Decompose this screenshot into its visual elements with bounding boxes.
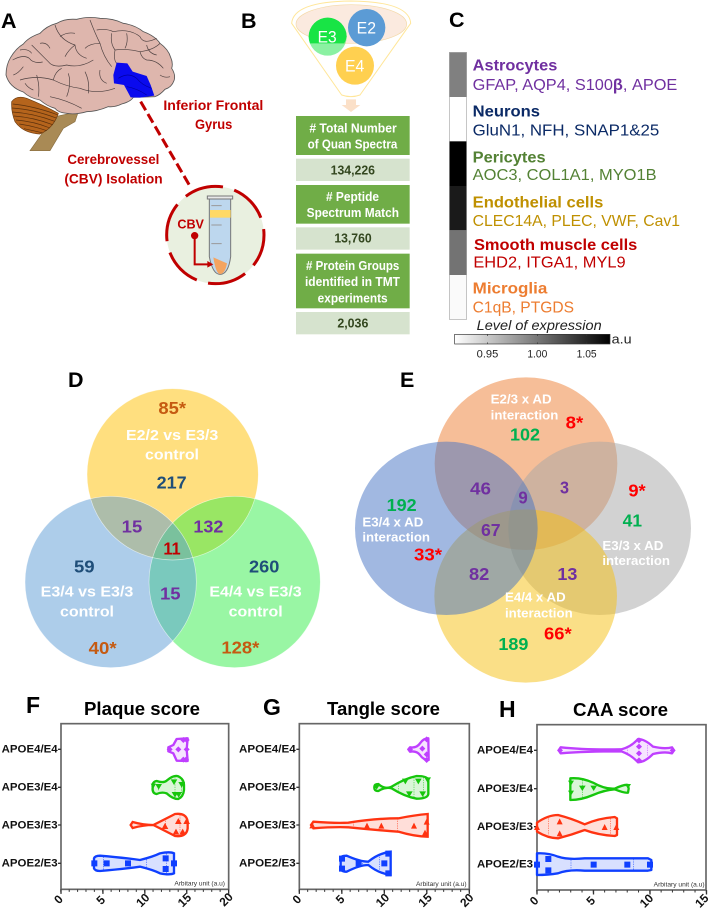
category labels: APOE3/E3 <box>2 819 58 831</box>
note: arbitrary unit: Arbitary unit (a.u) <box>654 882 705 889</box>
label: microglia <box>473 280 574 316</box>
set: E2/3 x AD: 8* <box>566 412 583 432</box>
set: E4/4 vs E3/3: E4/4 vs E3/3 <box>209 585 302 601</box>
overlap counts: 13 <box>557 564 577 584</box>
venn ellipses <box>355 377 691 683</box>
icon: cerebellum <box>12 97 58 134</box>
overlap counts: 67 <box>481 520 501 540</box>
violin: APOE3/E3 <box>309 814 430 837</box>
set: E4/4 x AD: 189 <box>498 634 528 654</box>
x axis labels: 5 <box>94 893 108 907</box>
plot frame and axis <box>58 724 230 892</box>
x axis labels <box>51 890 236 909</box>
box: total number of quan spectra: # Total Number <box>309 121 397 135</box>
set: E3/3 x AD: E3/3 x AD <box>602 538 663 553</box>
set: E3/4 x AD <box>362 495 442 565</box>
set: E3/4 x AD: E3/4 x AD <box>362 515 423 530</box>
icon: CBV tube in dashed circle: CBV <box>177 218 205 232</box>
icon: E4 circle <box>336 47 374 85</box>
box: protein groups: experiments <box>318 292 388 306</box>
box: peptide spectrum match: Spectrum Match <box>307 206 399 220</box>
arrow: funnel down <box>342 99 360 112</box>
label: cerebrovessel isolation <box>64 152 163 187</box>
x axis labels: 5 <box>584 893 598 908</box>
label: inferior frontal gyrus: Gyrus <box>195 117 233 132</box>
icon: inferior frontal gyrus highlight <box>113 63 154 98</box>
set: E2/2 vs E3/3: 217 <box>157 473 187 493</box>
panel letter A: A <box>1 9 17 33</box>
category labels: APOE2/E3 <box>477 859 533 871</box>
set: E2/3 x AD <box>491 391 583 445</box>
set: E3/4 vs E3/3: 40* <box>89 638 117 658</box>
set: E3/4 x AD: interaction <box>362 530 430 545</box>
set: E4/4 vs E3/3: 128* <box>221 637 260 657</box>
overlap counts: 15 <box>160 583 181 603</box>
plot frame and axis <box>534 725 707 892</box>
overlap counts: 11 <box>163 538 181 558</box>
set: E3/4 vs E3/3: control <box>60 605 114 621</box>
label: pericytes <box>473 149 657 184</box>
legend: level of expression colour bar: 0.95 <box>477 348 498 360</box>
x axis labels: 0 <box>51 892 66 907</box>
label: pericytes: Pericytes <box>473 149 546 166</box>
set: E4/4 vs E3/3 <box>209 556 302 657</box>
x axis labels: 5 <box>333 892 348 907</box>
category labels <box>239 744 297 870</box>
note: arbitrary unit: Arbitary unit (a.u) <box>174 881 225 888</box>
set: E4/4 vs E3/3: control <box>229 605 283 621</box>
panel letter G: G <box>263 694 281 720</box>
label: endothelial cells: CLEC14A, PLEC, VWF, Cav1 <box>473 213 680 230</box>
panel letter B: B <box>241 9 257 33</box>
panel C: cell-type marker expression <box>449 8 680 360</box>
legend: level of expression colour bar: 1.05 <box>577 348 597 360</box>
icon: E2 circle <box>348 9 385 46</box>
set: E3/3 x AD: 41 <box>623 511 642 531</box>
value: 2,036 <box>296 312 410 334</box>
box: total number of quan spectra <box>296 116 410 155</box>
set: E4/4 x AD <box>498 590 573 654</box>
plot frame and axis <box>296 724 471 892</box>
box: peptide spectrum match: # Peptide <box>326 190 379 204</box>
set: E4/4 x AD: E4/4 x AD <box>505 590 566 605</box>
box: protein groups <box>296 254 410 308</box>
x axis labels: 20 <box>217 890 236 909</box>
value: 2,036: 2,036 <box>337 316 368 330</box>
icon: brain stem <box>30 112 78 151</box>
set: E2/2 vs E3/3: E2/2 vs E3/3 <box>126 428 218 444</box>
label: microglia: Microglia <box>473 280 548 297</box>
category labels: APOE2/E3 <box>2 858 58 870</box>
panel letter C: C <box>449 8 465 32</box>
category labels: APOE4/E4 <box>477 745 534 757</box>
label: smooth muscle cells: Smooth muscle cells <box>474 237 638 254</box>
violin: APOE4/E4 <box>407 736 430 763</box>
legend: level of expression colour bar <box>455 317 632 360</box>
legend: level of expression colour bar: Level of expression <box>477 317 602 333</box>
label: astrocytes: GFAP, AQP4, S100β, APOE <box>473 77 677 94</box>
icon: CBV tube in dashed circle <box>167 186 264 284</box>
set: E2/2 vs E3/3: 85* <box>158 398 186 418</box>
label: cerebrovessel isolation: (CBV) Isolation <box>64 172 163 187</box>
note: arbitrary unit: Arbitary unit (a.u) <box>416 881 467 888</box>
arrow: dashed connector to tube <box>141 102 191 187</box>
set: E3/3 x AD: interaction <box>602 553 670 568</box>
panel G: tangle score violin plot <box>239 694 477 909</box>
box: protein groups: identified in TMT <box>305 275 400 289</box>
violin: APOE2/E3 <box>339 851 391 876</box>
panel A: brain and cerebrovessel isolation <box>1 9 264 284</box>
value: 13,760: 13,760 <box>334 232 372 246</box>
violin: APOE3/E4 <box>151 776 185 799</box>
title: plaque score: Plaque score <box>84 698 200 719</box>
violin: APOE2/E3 <box>91 852 177 874</box>
box: protein groups: # Protein Groups <box>306 259 399 273</box>
x axis labels: 0 <box>290 892 304 907</box>
icon: E4 circle: E4 <box>345 57 364 76</box>
violin: APOE3/E3 <box>534 815 619 838</box>
set: E3/3 x AD <box>602 481 670 568</box>
category labels: APOE3/E4 <box>239 782 297 794</box>
violin: APOE2/E3 <box>534 853 653 875</box>
category labels: APOE3/E3 <box>239 819 296 831</box>
panel B: funnel and counts <box>241 1 411 334</box>
icon: funnel <box>292 1 411 97</box>
legend: level of expression colour bar: 1.00 <box>527 348 547 360</box>
set: E3/4 vs E3/3 <box>41 556 133 658</box>
set: E4/4 x AD: 66* <box>544 623 572 643</box>
panel H: CAA score violin plot <box>477 696 708 909</box>
label: cerebrovessel isolation: Cerebrovessel <box>67 152 159 167</box>
overlap counts: 46 <box>470 479 491 499</box>
label: endothelial cells: Endothelial cells <box>473 194 604 211</box>
overlap counts: 3 <box>560 477 569 497</box>
legend: level of expression colour bar: a.u <box>612 331 632 346</box>
label: smooth muscle cells <box>473 237 638 271</box>
set: E2/3 x AD: 102 <box>510 425 540 445</box>
label: inferior frontal gyrus <box>163 98 263 132</box>
value: 134,226: 134,226 <box>331 163 375 177</box>
overlap counts <box>122 516 223 603</box>
value: 13,760 <box>296 227 410 250</box>
category labels <box>2 744 59 870</box>
venn circles <box>25 389 320 668</box>
set: E3/3 x AD: 9* <box>628 481 646 501</box>
box: total number of quan spectra: of Quan Spectra <box>308 137 398 151</box>
overlap counts: 82 <box>469 564 489 584</box>
set: E2/2 vs E3/3: control <box>145 447 199 463</box>
heatmap column <box>449 52 467 319</box>
set: E4/4 x AD: interaction <box>505 605 573 620</box>
label: smooth muscle cells: EHD2, ITGA1, MYL9 <box>473 254 626 271</box>
panel F: plaque score violin plot <box>2 692 236 909</box>
panel letter H: H <box>499 696 516 722</box>
set: E3/4 x AD: 33* <box>414 545 442 565</box>
set: E2/3 x AD: interaction <box>491 407 558 422</box>
title: tangle score: Tangle score <box>327 698 440 719</box>
x axis labels <box>290 890 477 909</box>
overlap counts: 9 <box>518 487 528 507</box>
icon: E3 circle <box>309 18 347 56</box>
panel D: three-way Venn diagram <box>25 368 320 668</box>
icon: E3 circle: E3 <box>318 27 337 46</box>
value: 134,226 <box>296 159 410 181</box>
box: peptide spectrum match <box>296 185 410 224</box>
label: endothelial cells <box>473 194 680 230</box>
violin: APOE3/E4 <box>568 778 631 800</box>
label: neurons: GluN1, NFH, SNAP1&25 <box>473 123 660 140</box>
category labels: APOE3/E3 <box>477 821 533 833</box>
category labels: APOE2/E3 <box>239 858 296 870</box>
label: astrocytes: Astrocytes <box>473 58 558 75</box>
violin: APOE3/E4 <box>374 776 431 799</box>
set: E4/4 vs E3/3: 260 <box>249 556 279 576</box>
label: neurons <box>473 104 660 140</box>
set: E3/4 x AD: 192 <box>387 495 417 515</box>
panel E: four-way Venn diagram <box>355 368 691 683</box>
x axis labels <box>527 891 708 909</box>
label: pericytes: AOC3, COL1A1, MYO1B <box>473 167 657 184</box>
category labels: APOE4/E4 <box>2 744 59 756</box>
category labels: APOE3/E4 <box>2 782 59 794</box>
label: microglia: C1qB, PTGDS <box>473 299 574 316</box>
overlap counts: 15 <box>122 516 142 536</box>
violin: APOE4/E4 <box>167 737 190 763</box>
x axis labels: 0 <box>527 893 542 908</box>
label: astrocytes <box>473 58 677 94</box>
violin: APOE4/E4 <box>557 737 676 763</box>
overlap counts: 132 <box>193 516 223 536</box>
violin: APOE3/E3 <box>131 814 190 836</box>
title: CAA score: CAA score <box>573 699 668 720</box>
category labels: APOE4/E4 <box>239 744 297 756</box>
set: E3/4 vs E3/3: E3/4 vs E3/3 <box>41 585 133 601</box>
overlap counts <box>469 477 577 584</box>
icon: brain cortex <box>6 17 175 114</box>
category labels: APOE3/E4 <box>477 783 534 795</box>
label: inferior frontal gyrus: Inferior Frontal <box>163 98 263 113</box>
icon: E2 circle: E2 <box>357 18 376 37</box>
set: E3/4 vs E3/3: 59 <box>74 556 95 576</box>
panel letter D: D <box>68 368 84 392</box>
panel letter F: F <box>26 692 40 718</box>
category labels <box>477 745 534 871</box>
set: E2/2 vs E3/3 <box>126 398 218 493</box>
panel letter E: E <box>400 368 414 392</box>
set: E2/3 x AD: E2/3 x AD <box>491 391 552 406</box>
label: neurons: Neurons <box>473 104 540 121</box>
